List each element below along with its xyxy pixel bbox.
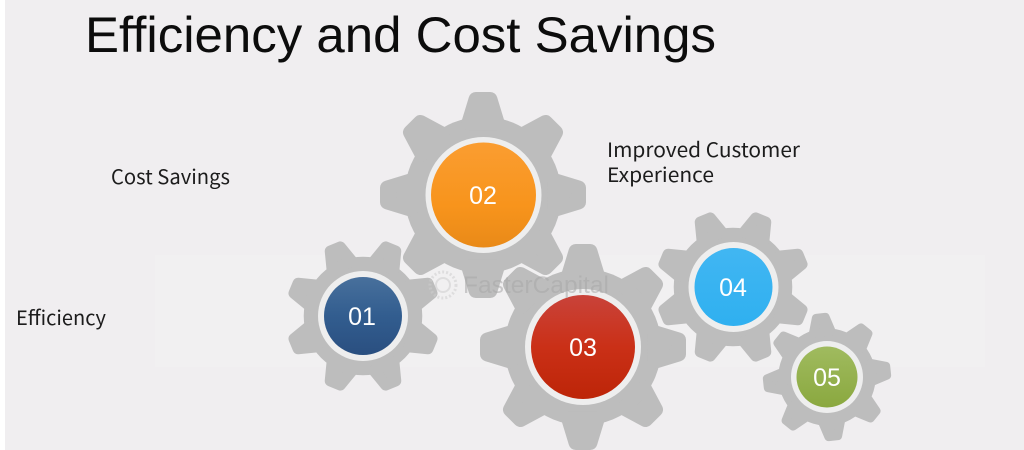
- watermark: FasterCapital: [463, 272, 609, 299]
- label: Improved Customer Experience: [607, 134, 800, 188]
- gear 02: [387, 99, 579, 291]
- gear 01: 01: [348, 303, 376, 331]
- label: Improved Customer Experience: Experience: [607, 159, 714, 188]
- label: Cost Savings: Cost Savings: [111, 161, 230, 190]
- label: Improved Customer Experience: Improved Customer: [607, 134, 800, 163]
- gear 04: 04: [719, 274, 747, 302]
- label: Efficiency: Efficiency: [16, 302, 107, 331]
- gear 01: [268, 221, 458, 411]
- gear 04: [638, 192, 828, 382]
- gear 03: 03: [569, 334, 597, 362]
- gear 02: 02: [469, 182, 497, 210]
- gear 05: 05: [813, 364, 841, 392]
- title: Efficiency and Cost Savings: [85, 7, 716, 63]
- gear 03: [487, 251, 679, 443]
- lighter band: [155, 255, 985, 367]
- gear 05: [762, 312, 892, 442]
